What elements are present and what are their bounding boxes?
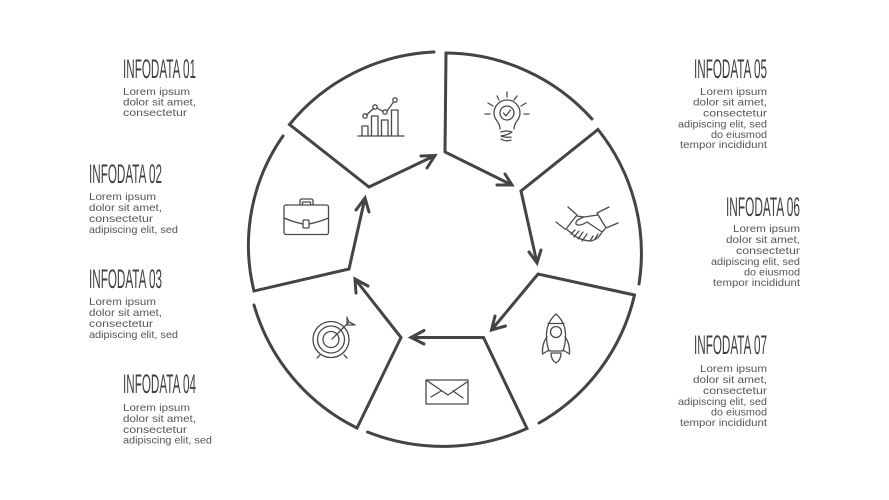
text block: infodata 02: Lorem ipsum — [89, 191, 156, 203]
text block: infodata 05 — [678, 54, 768, 151]
text block: infodata 07: adipiscing elit, sed — [678, 396, 767, 408]
text block: infodata 01: Lorem ipsum — [123, 86, 190, 98]
text block: infodata 01: dolor sit amet, — [123, 96, 196, 108]
text block: infodata 06: dolor sit amet, — [726, 234, 800, 246]
text block: infodata 04: INFODATA 04 — [123, 369, 196, 399]
text block: infodata 03: adipiscing elit, sed — [89, 329, 178, 341]
text block: infodata 05: consectetur — [703, 108, 768, 120]
text block: infodata 07: do eiusmod — [711, 406, 767, 418]
text block: infodata 07: Lorem ipsum — [700, 363, 767, 375]
text block: infodata 06: consectetur — [736, 245, 801, 257]
text block: infodata 05: do eiusmod — [711, 129, 767, 141]
text block: infodata 07: dolor sit amet, — [693, 374, 767, 386]
cycle diagram — [248, 52, 641, 446]
segment 3: target — [254, 279, 401, 428]
text block: infodata 03: consectetur — [89, 318, 154, 330]
text block: infodata 01 — [123, 54, 196, 119]
infographic canvas: INFODATA 07 — [694, 330, 767, 360]
text block: infodata 04: dolor sit amet, — [123, 413, 196, 425]
text block: infodata 07: consectetur — [703, 385, 768, 397]
segment 2: briefcase — [248, 136, 369, 291]
icon: bar chart — [358, 98, 404, 136]
text block: infodata 03: INFODATA 03 — [89, 264, 162, 294]
text block: infodata 02: INFODATA 02 — [89, 159, 162, 189]
text block: infodata 06: do eiusmod — [744, 266, 800, 278]
text block: infodata 07 — [678, 330, 768, 429]
icon: envelope — [426, 380, 468, 404]
segment 4: envelope — [368, 330, 527, 446]
text block: infodata 07: tempor incididunt — [680, 417, 767, 429]
text block: infodata 04: consectetur — [123, 424, 188, 436]
text block: infodata 05: tempor incididunt — [680, 139, 767, 151]
icon: handshake — [556, 207, 618, 241]
text block: infodata 05: dolor sit amet, — [693, 96, 767, 108]
text block: infodata 03 — [89, 264, 178, 341]
text block: infodata 03: Lorem ipsum — [89, 296, 156, 308]
segment 1: chart — [290, 52, 435, 187]
segment 6: handshake — [521, 130, 641, 284]
text block: infodata 02: dolor sit amet, — [89, 202, 162, 214]
text block: infodata 06: Lorem ipsum — [733, 223, 800, 235]
infographic canvas: INFODATA 01 — [123, 54, 196, 84]
text block: infodata 04 — [123, 369, 212, 446]
segment 7: light bulb — [445, 53, 592, 185]
icon: light bulb — [485, 92, 529, 141]
text block: infodata 02 — [89, 159, 178, 236]
text block: infodata 06 — [711, 192, 801, 289]
text block: infodata 05: adipiscing elit, sed — [678, 118, 767, 130]
icon: rocket — [542, 314, 570, 363]
text block: infodata 05: Lorem ipsum — [700, 86, 767, 98]
text block: infodata 04: adipiscing elit, sed — [123, 434, 212, 446]
text block: infodata 06: adipiscing elit, sed — [711, 256, 800, 268]
text block: infodata 03: dolor sit amet, — [89, 307, 162, 319]
text block: infodata 06: tempor incididunt — [713, 277, 800, 289]
icon: briefcase — [284, 199, 328, 234]
segment 5: rocket — [492, 274, 634, 423]
text block: infodata 02: adipiscing elit, sed — [89, 224, 178, 236]
text block: infodata 02: consectetur — [89, 213, 154, 225]
text block: infodata 01: consectetur — [123, 107, 188, 119]
infographic canvas: INFODATA 05 — [694, 54, 767, 84]
icon: target with arrow — [313, 317, 355, 358]
text block: infodata 04: Lorem ipsum — [123, 402, 190, 414]
